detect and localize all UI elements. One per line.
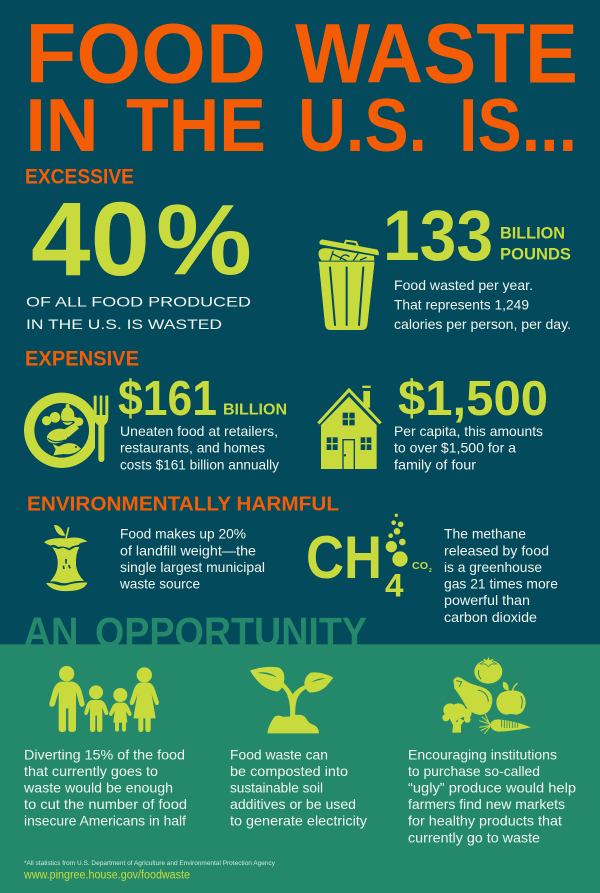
icon: plate and fork <box>24 390 108 470</box>
title: FOOD <box>26 6 266 100</box>
text: diverting food: Diverting 15% of the food <box>24 746 185 762</box>
stat: 161 billion: restaurants, and homes <box>120 440 265 456</box>
heading: environmentally harmful: ENVIRONMENTALLY HARMFUL <box>27 492 339 516</box>
stat: 161 billion: Uneaten food at retailers, <box>120 423 278 439</box>
text: composting: Food waste can <box>230 746 328 762</box>
text: diverting food <box>23 746 187 828</box>
text: composting: additives or be used <box>230 796 356 812</box>
stat: 133 billion pounds: calories per person, per day. <box>394 316 571 332</box>
text: methane: The methane <box>444 526 526 542</box>
icon: house <box>318 386 381 469</box>
stat: 133 billion pounds: Food wasted per year. <box>394 277 533 293</box>
icon: methane formula: CH <box>306 524 382 591</box>
footnote: *All statistics from U.S. Department of Agriculture and Environmental Protection Agency <box>24 860 276 867</box>
text: ugly produce: to purchase so-called <box>408 763 540 779</box>
title: IN <box>26 83 98 167</box>
text: methane: released by food <box>444 542 549 558</box>
text: composting: sustainable soil <box>230 780 323 796</box>
icon: apple core <box>44 525 87 591</box>
text: methane: is a greenhouse <box>444 559 542 575</box>
heading: an opportunity: OPPORTUNITY <box>95 608 367 656</box>
title: THE <box>126 83 266 167</box>
icon: sprout <box>250 667 333 733</box>
text: composting <box>230 746 367 828</box>
title: U.S. <box>298 83 427 167</box>
text: composting: to generate electricity <box>230 812 367 828</box>
icon: methane formula: CO <box>412 561 428 572</box>
stat: 1,500 per capita: family of four <box>394 456 476 472</box>
title: WASTE <box>295 6 578 100</box>
text: methane: carbon dioxide <box>444 609 537 625</box>
icon: family <box>49 666 159 732</box>
stat: 1,500 per capita <box>394 371 548 472</box>
stat: 133 billion pounds: That represents 1,249 <box>394 296 529 312</box>
text: diverting food: to cut the number of food <box>24 796 187 812</box>
title: IS... <box>459 83 577 167</box>
icon: trash can <box>318 239 379 330</box>
text: diverting food: waste would be enough <box>23 780 173 796</box>
icon: methane formula: 2 <box>429 568 432 574</box>
stat: 40 percent: % <box>156 184 252 296</box>
text: ugly produce: for healthy products that <box>408 812 562 828</box>
stat: 40 percent: IN THE U.S. IS WASTED <box>26 316 222 332</box>
text: landfill weight <box>119 526 265 592</box>
website link: www.pingree.house.gov/foodwaste <box>23 870 190 882</box>
stat: 133 billion pounds: BILLION <box>500 224 565 242</box>
text: diverting food: insecure Americans in half <box>24 812 186 828</box>
icon: methane formula <box>306 514 432 604</box>
icon: methane formula: 4 <box>385 568 404 604</box>
stat: 1,500 per capita: $1,500 <box>398 371 548 426</box>
text: landfill weight: Food makes up 20% <box>120 526 246 542</box>
stat: 161 billion: BILLION <box>223 402 287 418</box>
stat: 40 percent: OF ALL FOOD PRODUCED <box>26 294 251 310</box>
stat: 133 billion pounds <box>383 197 571 332</box>
stat: 161 billion: $161 <box>118 371 217 426</box>
heading: an opportunity: AN <box>24 608 78 656</box>
stat: 161 billion: costs $161 billion annually <box>120 456 279 472</box>
stat: 133 billion pounds: 133 <box>383 197 493 276</box>
stat: 133 billion pounds: POUNDS <box>500 244 571 264</box>
text: methane: gas 21 times more <box>444 576 558 592</box>
stat: 161 billion <box>118 371 287 472</box>
stat: 1,500 per capita: Per capita, this amounts <box>394 423 543 439</box>
text: ugly produce <box>408 746 576 846</box>
text: ugly produce: Encouraging institutions <box>408 746 557 762</box>
heading: excessive: EXCESSIVE <box>25 166 134 188</box>
text: methane <box>444 526 558 625</box>
heading: expensive: EXPENSIVE <box>25 348 139 370</box>
stat: 1,500 per capita: to over $1,500 for a <box>394 440 516 456</box>
text: composting: be composted into <box>230 763 348 779</box>
icon: vegetables <box>442 656 531 734</box>
text: diverting food: that currently goes to <box>24 763 158 779</box>
panel: opportunity <box>0 644 600 893</box>
text: ugly produce: “ugly” produce would help <box>408 780 576 796</box>
text: landfill weight: waste source <box>119 576 200 592</box>
stat: 40 percent: 40 <box>31 181 150 298</box>
text: methane: powerful than <box>444 592 530 608</box>
title <box>26 6 578 167</box>
text: ugly produce: farmers find new markets <box>408 796 565 812</box>
text: landfill weight: single largest municipal <box>120 559 265 575</box>
stat: 40 percent <box>26 181 252 332</box>
text: landfill weight: of landfill weight—the <box>120 542 256 558</box>
text: ugly produce: currently go to waste <box>408 830 540 846</box>
